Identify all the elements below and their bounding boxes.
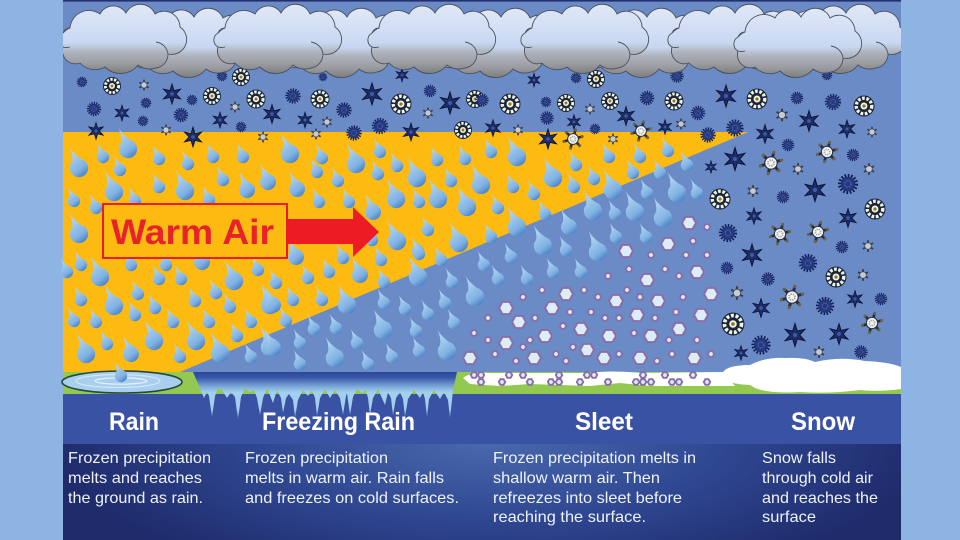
sky panel [63,0,901,372]
raindrops field [61,128,703,370]
text: rain description: melts and reaches [68,470,202,487]
text: sleet description: reaching the surface. [493,509,646,526]
text: snow description: through cold air [762,470,874,487]
text: rain description: Frozen precipitation [68,450,211,467]
heading: Freezing Rain: Freezing Rain [262,408,415,436]
icicles on frozen surface [193,372,457,420]
text: freezing rain description [245,450,459,507]
text: freezing rain description: and freezes on cold surfaces. [245,490,459,507]
text: sleet description [493,450,696,526]
heading: Sleet: Sleet [575,408,634,436]
description panel [63,444,901,540]
text: freezing rain description: melts in warm air. Rain falls [245,470,444,487]
text: sleet description: Frozen precipitation melts in [493,450,696,467]
back clouds [127,4,907,78]
warm air label box [103,204,287,258]
front clouds [59,4,862,78]
title band [63,394,901,444]
text: snow description [762,450,878,526]
text: freezing rain description: Frozen precipitation [245,450,388,467]
warm air layer [63,132,748,372]
text: rain description: the ground as rain. [68,490,203,507]
text: snow description: surface [762,509,816,526]
sleet pellets [463,217,718,364]
sleet pellets on ground [471,372,710,385]
ground strip [63,372,901,394]
snow on ground [463,358,901,393]
text: snow description: Snow falls [762,450,836,467]
snowflakes field [78,68,886,360]
text: sleet description: refreezes into sleet before [493,490,682,507]
text: rain description [68,450,211,507]
heading: Snow: Snow [791,408,856,436]
warm air arrow [287,207,379,257]
warm air label box: Warm Air [111,213,274,252]
text: snow description: and reaches the [762,490,878,507]
heading: Rain: Rain [109,408,159,436]
puddle with drop [62,362,182,393]
text: sleet description: shallow warm air. Then [493,470,660,487]
